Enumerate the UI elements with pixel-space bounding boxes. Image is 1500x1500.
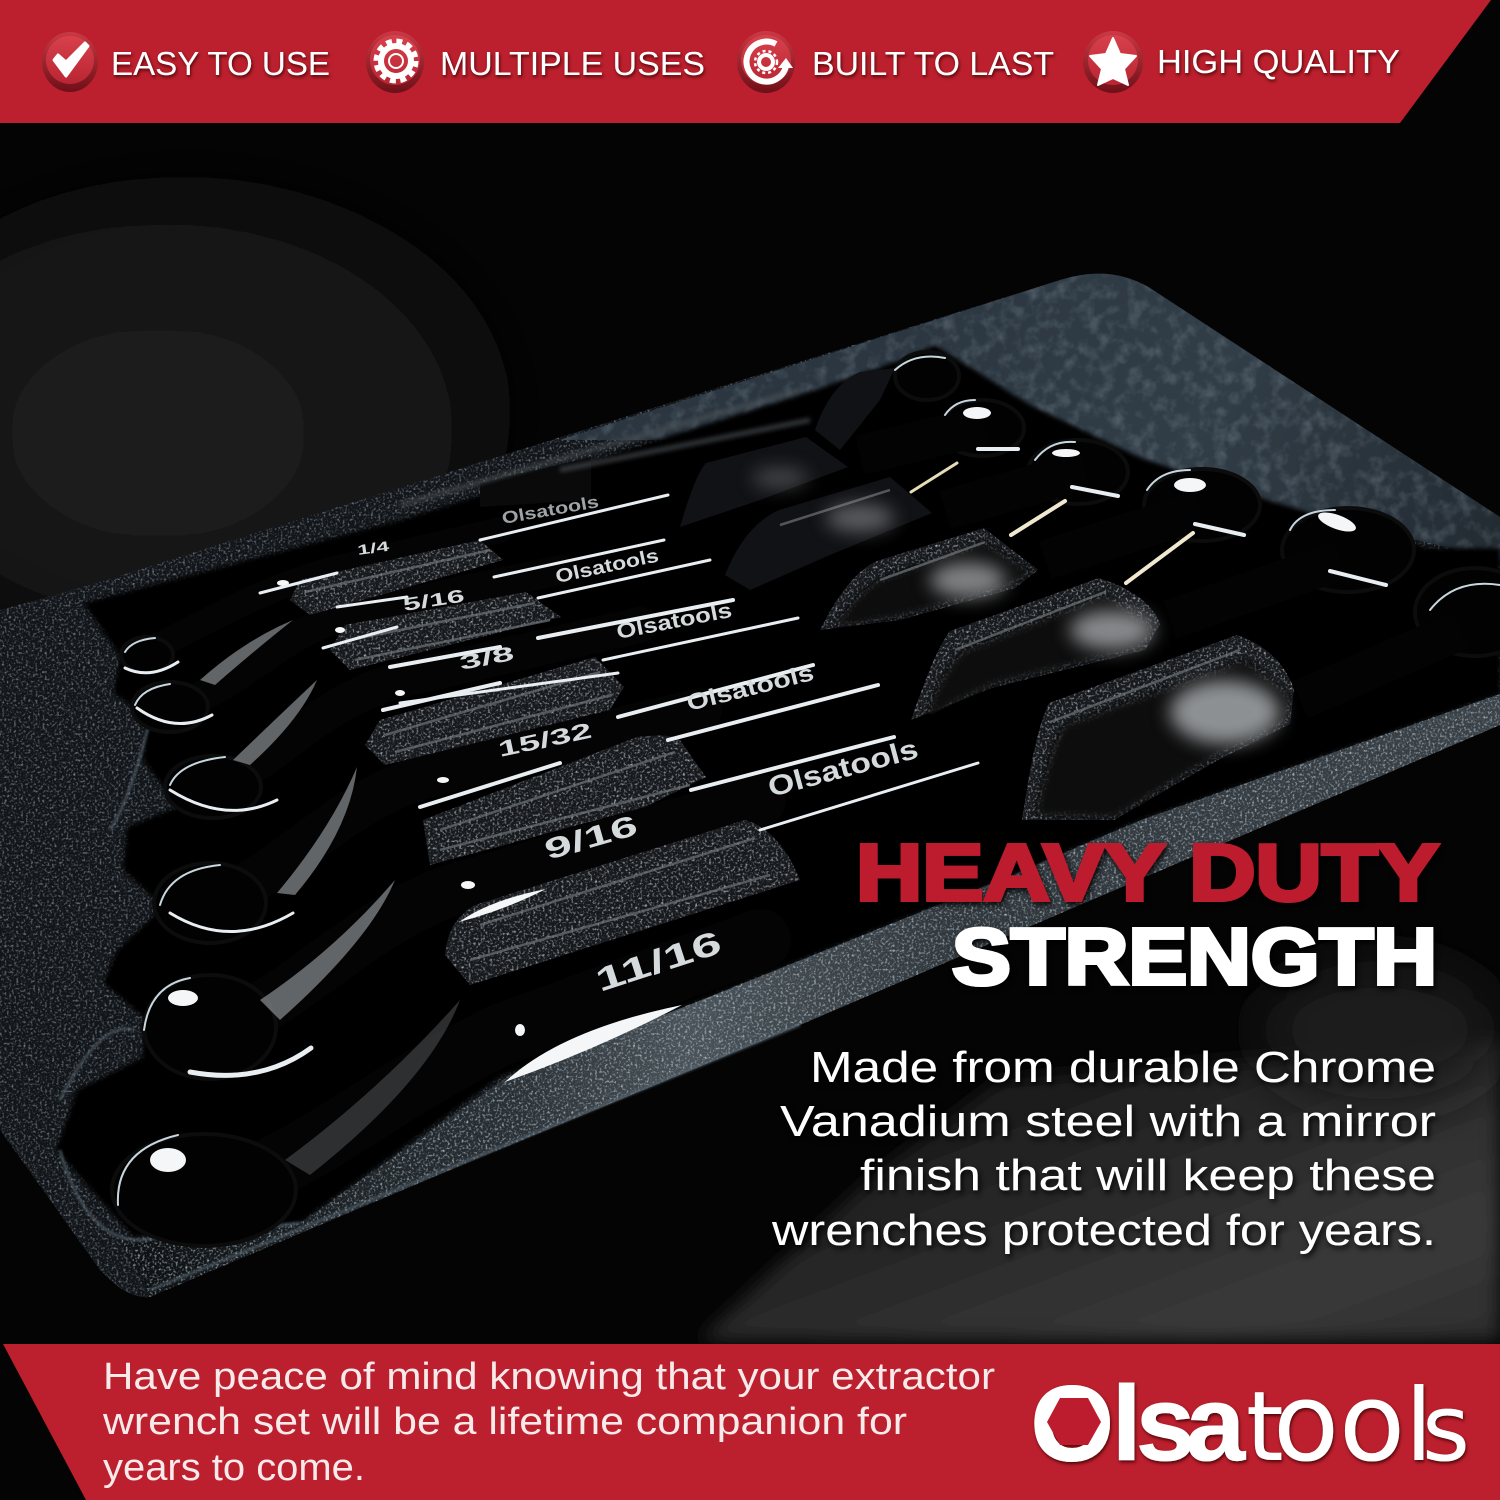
feature label: built to last: BUILT TO LAST: [812, 45, 1054, 82]
white wedges: [150, 407, 1358, 1172]
tray recess: [56, 345, 1500, 1237]
rail ridges: [400, 390, 810, 505]
tray top surface: [560, 274, 1500, 560]
wrench size markings: Olsatools: [554, 546, 661, 588]
wrench size markings: 5/16: [401, 585, 466, 615]
heading: HEAVY DUTY: [856, 828, 1439, 917]
brand logo: o: [1273, 1361, 1339, 1486]
wrench handles: [150, 530, 760, 1190]
dark lump bodies: [835, 542, 1290, 818]
wrench ring ends: [112, 352, 1500, 1246]
brand logo: l: [1112, 1365, 1141, 1483]
brand logo: a: [1186, 1365, 1246, 1483]
wrench size markings: Olsatools: [684, 659, 816, 716]
brand logo: O: [1031, 1365, 1113, 1483]
wrench size markings: 11/16: [591, 923, 726, 999]
wrench size markings: Olsatools: [615, 599, 734, 644]
body description: finish that will keep these: [860, 1151, 1436, 1200]
body description: [771, 1043, 1436, 1255]
wrench size markings: Olsatools: [500, 492, 600, 528]
brand logo: s: [1422, 1375, 1470, 1482]
closing message: years to come.: [103, 1447, 365, 1489]
feature label: easy to use: EASY TO USE: [111, 45, 330, 82]
icon: gear button: [366, 31, 424, 93]
wrench size markings: [356, 492, 921, 999]
tray rim lines: [60, 720, 800, 1290]
tray front strip: [100, 680, 1500, 1320]
body description: wrenches protected for years.: [771, 1206, 1436, 1255]
body description: Made from durable Chrome: [810, 1043, 1436, 1092]
heading: [856, 828, 1439, 1001]
wrench tray: [0, 274, 1500, 1298]
feature label: high quality: HIGH QUALITY: [1157, 43, 1400, 80]
chrome highlights: [118, 356, 1500, 1205]
rail lump: [480, 457, 591, 507]
brand logo: o: [1339, 1361, 1405, 1486]
streaks and ring arcs: [118, 356, 1500, 1205]
closing message: Have peace of mind knowing that your extractor: [103, 1356, 995, 1398]
body description: Vanadium steel with a mirror: [780, 1097, 1436, 1146]
bottom banner: [3, 1344, 1500, 1500]
icon: cycle gear button: [737, 31, 795, 93]
gloss curves: [200, 620, 460, 1175]
brand logo: t: [1246, 1371, 1284, 1483]
closing message: wrench set will be a lifetime companion for: [102, 1401, 907, 1443]
foam lumps: [290, 368, 1294, 985]
top banner: [0, 0, 1491, 123]
wrench size markings: 15/32: [496, 718, 594, 762]
brand logo: s: [1136, 1365, 1195, 1483]
right handle shafts: [860, 425, 1460, 700]
brand logo: [1031, 1361, 1470, 1486]
icon: check mark button: [42, 32, 98, 92]
heading: STRENGTH: [952, 912, 1437, 1001]
lump ridges: [305, 490, 1240, 960]
wrench size markings: Olsatools: [765, 733, 921, 803]
wrench size markings: 1/4: [356, 538, 390, 558]
lump sheen: [752, 468, 1280, 744]
icon: star button: [1083, 31, 1143, 93]
dark far lumps: [680, 368, 932, 590]
closing message: [102, 1356, 995, 1489]
wrench size markings: 3/8: [458, 643, 516, 675]
feature label: multiple uses: MULTIPLE USES: [440, 45, 705, 82]
wrench size markings: 9/16: [541, 810, 641, 867]
brand logo: l: [1405, 1367, 1433, 1484]
